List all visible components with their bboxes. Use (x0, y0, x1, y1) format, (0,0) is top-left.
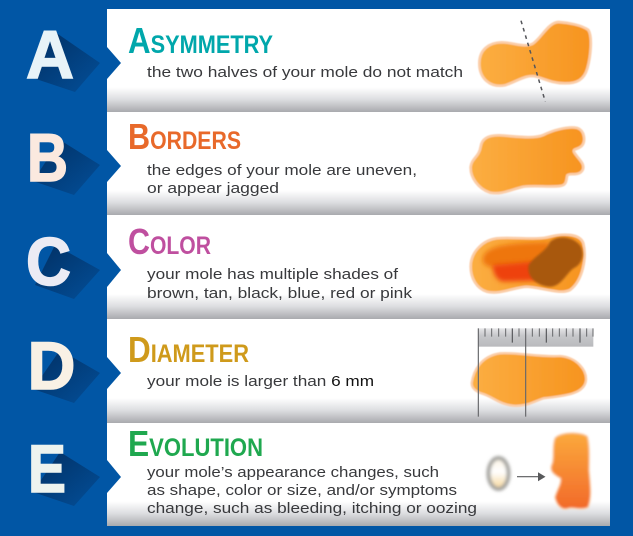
panel: asymmetry (26, 9, 610, 112)
text: evolution description: as shape, color or size, and/or symptoms (147, 482, 457, 499)
letter badge E (28, 431, 100, 507)
heading: color: COLOR (128, 221, 211, 262)
text: asymmetry description: the two halves of your mole do not match (147, 64, 463, 81)
letter badge E: E (28, 431, 66, 507)
letter badge D (28, 328, 100, 404)
letter badge C (26, 224, 100, 300)
text: evolution description: change, such as bleeding, itching or oozing (147, 500, 477, 517)
text: borders description (147, 162, 417, 197)
icon: jagged mole (471, 127, 584, 193)
text: evolution description: your mole’s appearance changes, such (147, 464, 439, 481)
text: color description: brown, tan, black, blue, red or pink (147, 285, 412, 302)
text: borders description: the edges of your mole are uneven, (147, 162, 417, 179)
letter badge C: C (26, 224, 71, 300)
icon: asymmetric mole (479, 21, 591, 102)
heading: borders: BORDERS (128, 116, 241, 157)
icon: mole with ruler (472, 328, 593, 417)
ruler (478, 328, 593, 347)
text: diameter description: your mole is larger than 6 mm (147, 373, 374, 390)
text: color description (147, 266, 412, 302)
pointer notch C (107, 253, 121, 287)
pointer notch B (107, 150, 121, 182)
icon: multicolor mole (471, 235, 585, 293)
pointer notch E (107, 460, 121, 493)
letter badge B: B (27, 120, 68, 196)
icon: evolved mole (551, 433, 591, 509)
text: evolution description (147, 464, 477, 517)
panel: color (26, 215, 610, 319)
letter badge A: A (26, 17, 74, 93)
letter badge A (26, 17, 100, 93)
arrow (517, 472, 546, 481)
letter badge D: D (28, 328, 76, 404)
text: color description: your mole has multiple shades of (147, 266, 399, 283)
text: borders description: or appear jagged (147, 180, 279, 197)
panel: diameter (28, 319, 610, 423)
panel: borders (27, 112, 610, 215)
letter badge B (27, 120, 100, 196)
icon: small mole (488, 458, 508, 489)
pointer notch D (107, 357, 121, 389)
heading: evolution: EVOLUTION (128, 423, 263, 464)
panel: evolution (28, 423, 610, 526)
pointer notch A (107, 47, 121, 79)
heading: diameter: DIAMETER (128, 329, 249, 370)
heading: asymmetry: ASYMMETRY (128, 20, 273, 61)
